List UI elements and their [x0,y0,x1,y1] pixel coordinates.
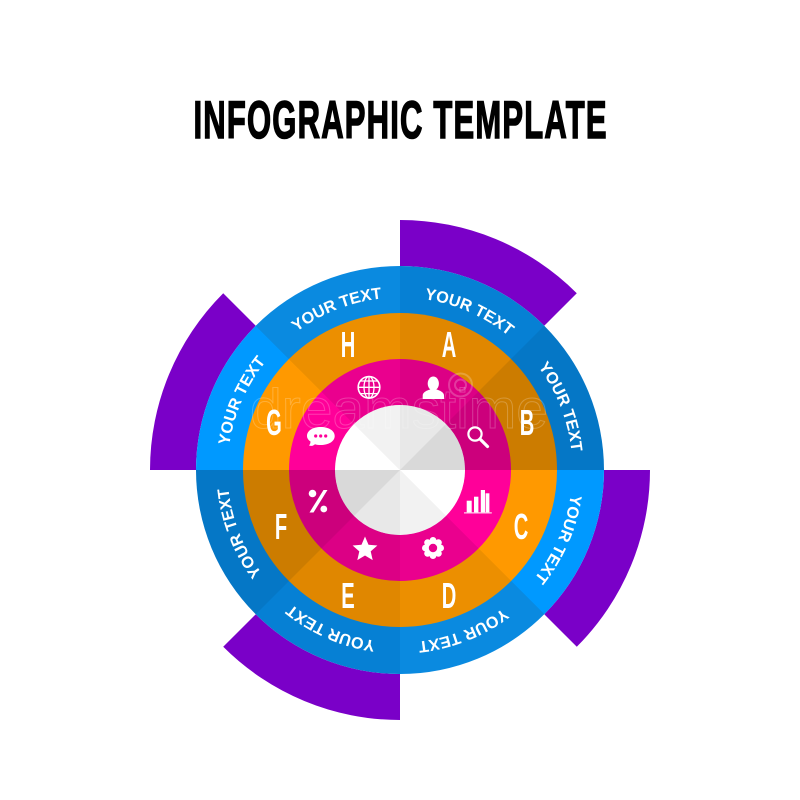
label: your text F: YOUR TEXT [217,490,260,580]
letter C: C [514,508,528,548]
curved labels [217,287,583,653]
icon: globe [358,376,380,398]
title: INFOGRAPHIC TEMPLATE [194,92,607,150]
watermark: dreamstime [250,377,548,440]
label: your text B: YOUR TEXT [540,360,583,450]
letters [266,326,534,617]
orange ring [243,313,557,627]
icon: gear [422,537,444,559]
letter E: E [341,577,355,617]
icon: percent [309,490,328,512]
icon: star [353,536,377,560]
letter A: A [442,326,456,366]
icon: bar chart [464,490,492,513]
pink ring [289,359,511,581]
blue ring [196,266,604,674]
purple outer sectors [150,220,650,720]
label: your text E: YOUR TEXT [284,606,374,652]
label: your text A: YOUR TEXT [426,288,516,334]
label: your text G: YOUR TEXT [218,354,264,444]
centre circle [335,405,465,535]
icon: user [423,376,444,399]
letter F: F [275,508,287,548]
label: your text H: YOUR TEXT [290,287,380,330]
letter D: D [442,577,456,617]
icon: speech bubble [307,427,335,446]
icon: magnifier [468,427,488,446]
label: your text D: YOUR TEXT [420,610,510,653]
letter G: G [266,404,282,444]
letter H: H [341,326,355,366]
letter B: B [520,404,534,444]
label: your text C: YOUR TEXT [536,496,582,586]
